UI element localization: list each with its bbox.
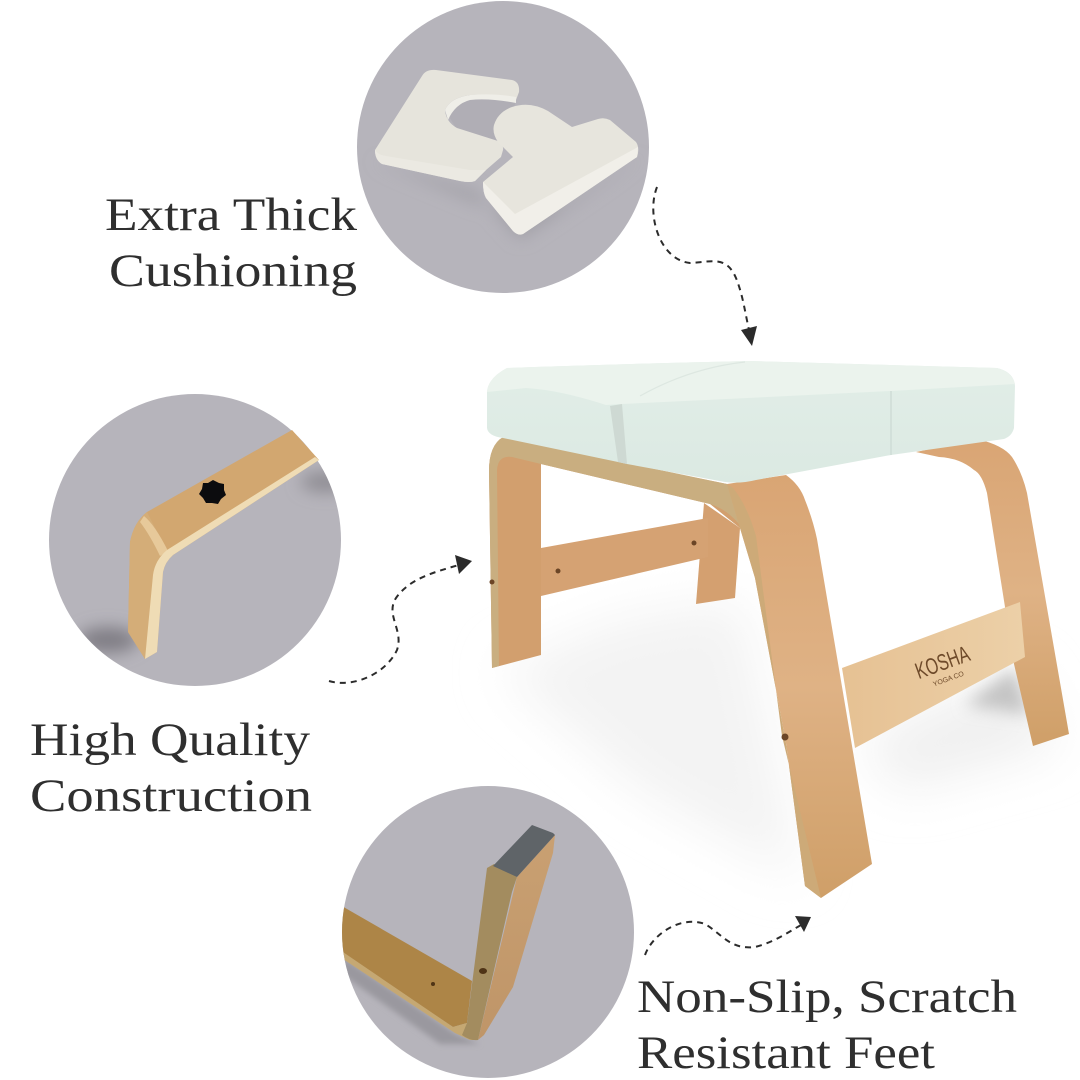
heading: non-slip scratch resistant feet: Non-Slip, Scratch xyxy=(637,971,1017,1023)
screw holes xyxy=(490,540,788,740)
icon: right cushion piece xyxy=(483,105,638,235)
logo: kosha yoga co: KOSHA xyxy=(912,640,973,684)
icon: plywood edge xyxy=(462,864,517,1040)
arrow: cushioning to seat xyxy=(653,187,757,346)
heading: high quality construction: High Quality xyxy=(30,714,311,766)
left bench leg and rail xyxy=(489,437,745,668)
panel: extra thick cushioning photo xyxy=(357,1,649,293)
heading: high quality construction: Construction xyxy=(30,770,312,822)
heading: extra thick cushioning xyxy=(105,189,358,297)
icon: bent wood frame corner xyxy=(128,430,319,659)
floor shadow xyxy=(500,600,1060,880)
screw holes xyxy=(431,968,487,986)
bench product photo xyxy=(487,361,1069,898)
right rear leg xyxy=(916,439,1069,746)
front stretcher with logo xyxy=(842,602,1025,748)
arrow: feet to bench leg xyxy=(645,916,811,955)
panel: high quality construction photo xyxy=(49,394,349,686)
heading: extra thick cushioning: Cushioning xyxy=(109,245,357,297)
logo: kosha yoga co: YOGA CO xyxy=(932,671,966,688)
icon: wood side face xyxy=(478,835,555,1040)
logo: kosha yoga co xyxy=(912,640,977,692)
back leg xyxy=(696,503,740,604)
panel: non-slip feet photo xyxy=(340,786,634,1078)
icon: black knob xyxy=(199,480,226,504)
heading: high quality construction xyxy=(30,714,312,822)
seat cushion xyxy=(487,361,1015,483)
icon: left cushion piece xyxy=(375,70,519,182)
arrow: construction to frame xyxy=(329,555,472,683)
back stretcher xyxy=(541,518,708,596)
front main leg xyxy=(727,475,872,898)
heading: extra thick cushioning: Extra Thick xyxy=(105,189,358,241)
icon: inner wood panel xyxy=(340,905,472,1027)
heading: non-slip scratch resistant feet: Resistant Feet xyxy=(637,1027,935,1079)
heading: non-slip scratch resistant feet xyxy=(637,971,1017,1079)
icon: felt foot pad xyxy=(493,825,555,877)
